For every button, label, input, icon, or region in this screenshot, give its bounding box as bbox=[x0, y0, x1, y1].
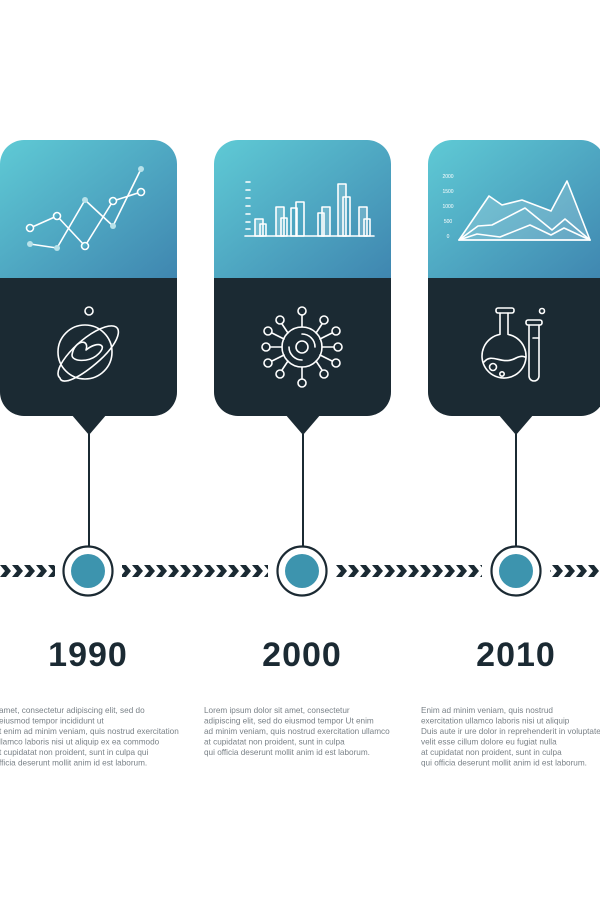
card: 1990 bbox=[0, 140, 177, 435]
year 1990: 1990 bbox=[48, 636, 128, 674]
icon: area chart: 2000 bbox=[442, 174, 454, 180]
year 2000: 2000 bbox=[262, 636, 342, 674]
icon: virus bbox=[262, 307, 342, 387]
text block 2010: Enim ad minim veniam, quis nostrud bbox=[421, 706, 553, 715]
connector line 2 bbox=[302, 434, 304, 546]
text block 2010: Duis aute ir ure dolor in reprehenderit in voluptate bbox=[421, 727, 600, 736]
icon: area chart bbox=[442, 174, 590, 240]
text block 2000: ad minim veniam, quis nostrud exercitation ullamco bbox=[204, 727, 390, 736]
text block 1990: llamco laboris nisi ut aliquip ex ea commodo bbox=[0, 738, 160, 746]
text block 2010: exercitation ullamco laboris nisi ut aliquip bbox=[421, 716, 570, 726]
card: 2010 bbox=[428, 140, 600, 435]
icon: area chart: 500 bbox=[444, 219, 452, 225]
connector line 1 bbox=[88, 434, 90, 546]
text block 2000: adipiscing elit, sed do eiusmod tempor Ut enim bbox=[204, 716, 374, 726]
connector line 3 bbox=[515, 434, 517, 546]
node 2010 bbox=[492, 546, 540, 596]
text block 2010: qui officia deserunt mollit anim id est laborum. bbox=[421, 758, 587, 768]
icon: flasks bbox=[482, 308, 544, 381]
icon: area chart: 0 bbox=[447, 234, 450, 240]
icon: planet bbox=[58, 307, 118, 381]
icon: area chart: 1500 bbox=[442, 189, 454, 195]
text block 2000: qui officia deserunt mollit anim id est laborum. bbox=[204, 748, 370, 757]
text block 1990: amet, consectetur adipiscing elit, sed do bbox=[0, 706, 145, 715]
icon: bar chart bbox=[245, 182, 374, 236]
text block 1990: eiusmod tempor incididunt ut bbox=[0, 716, 104, 726]
text block 1990: fficia deserunt mollit anim id est laborum. bbox=[0, 758, 147, 768]
text block 2000: Lorem ipsum dolor sit amet, consectetur bbox=[204, 706, 350, 715]
card: 2000 bbox=[214, 140, 391, 435]
icon: area chart: 1000 bbox=[442, 204, 454, 210]
year 2010: 2010 bbox=[476, 636, 556, 674]
icon: line chart bbox=[26, 166, 144, 251]
node 2000 bbox=[278, 546, 326, 596]
text block 1990: t cupidatat non proident, sunt in culpa qui bbox=[0, 748, 148, 757]
text block 1990: t enim ad minim veniam, quis nostrud exercitation bbox=[0, 727, 179, 736]
node 1990 bbox=[64, 546, 112, 596]
timeline chevron track bbox=[0, 564, 600, 578]
text block 2000: at cupidatat non proident, sunt in culpa bbox=[204, 738, 345, 746]
text block 2010: velit esse cillum dolore eu fugiat nulla bbox=[421, 738, 557, 746]
text block 2010: at cupidatat non proident, sunt in culpa bbox=[421, 748, 562, 757]
